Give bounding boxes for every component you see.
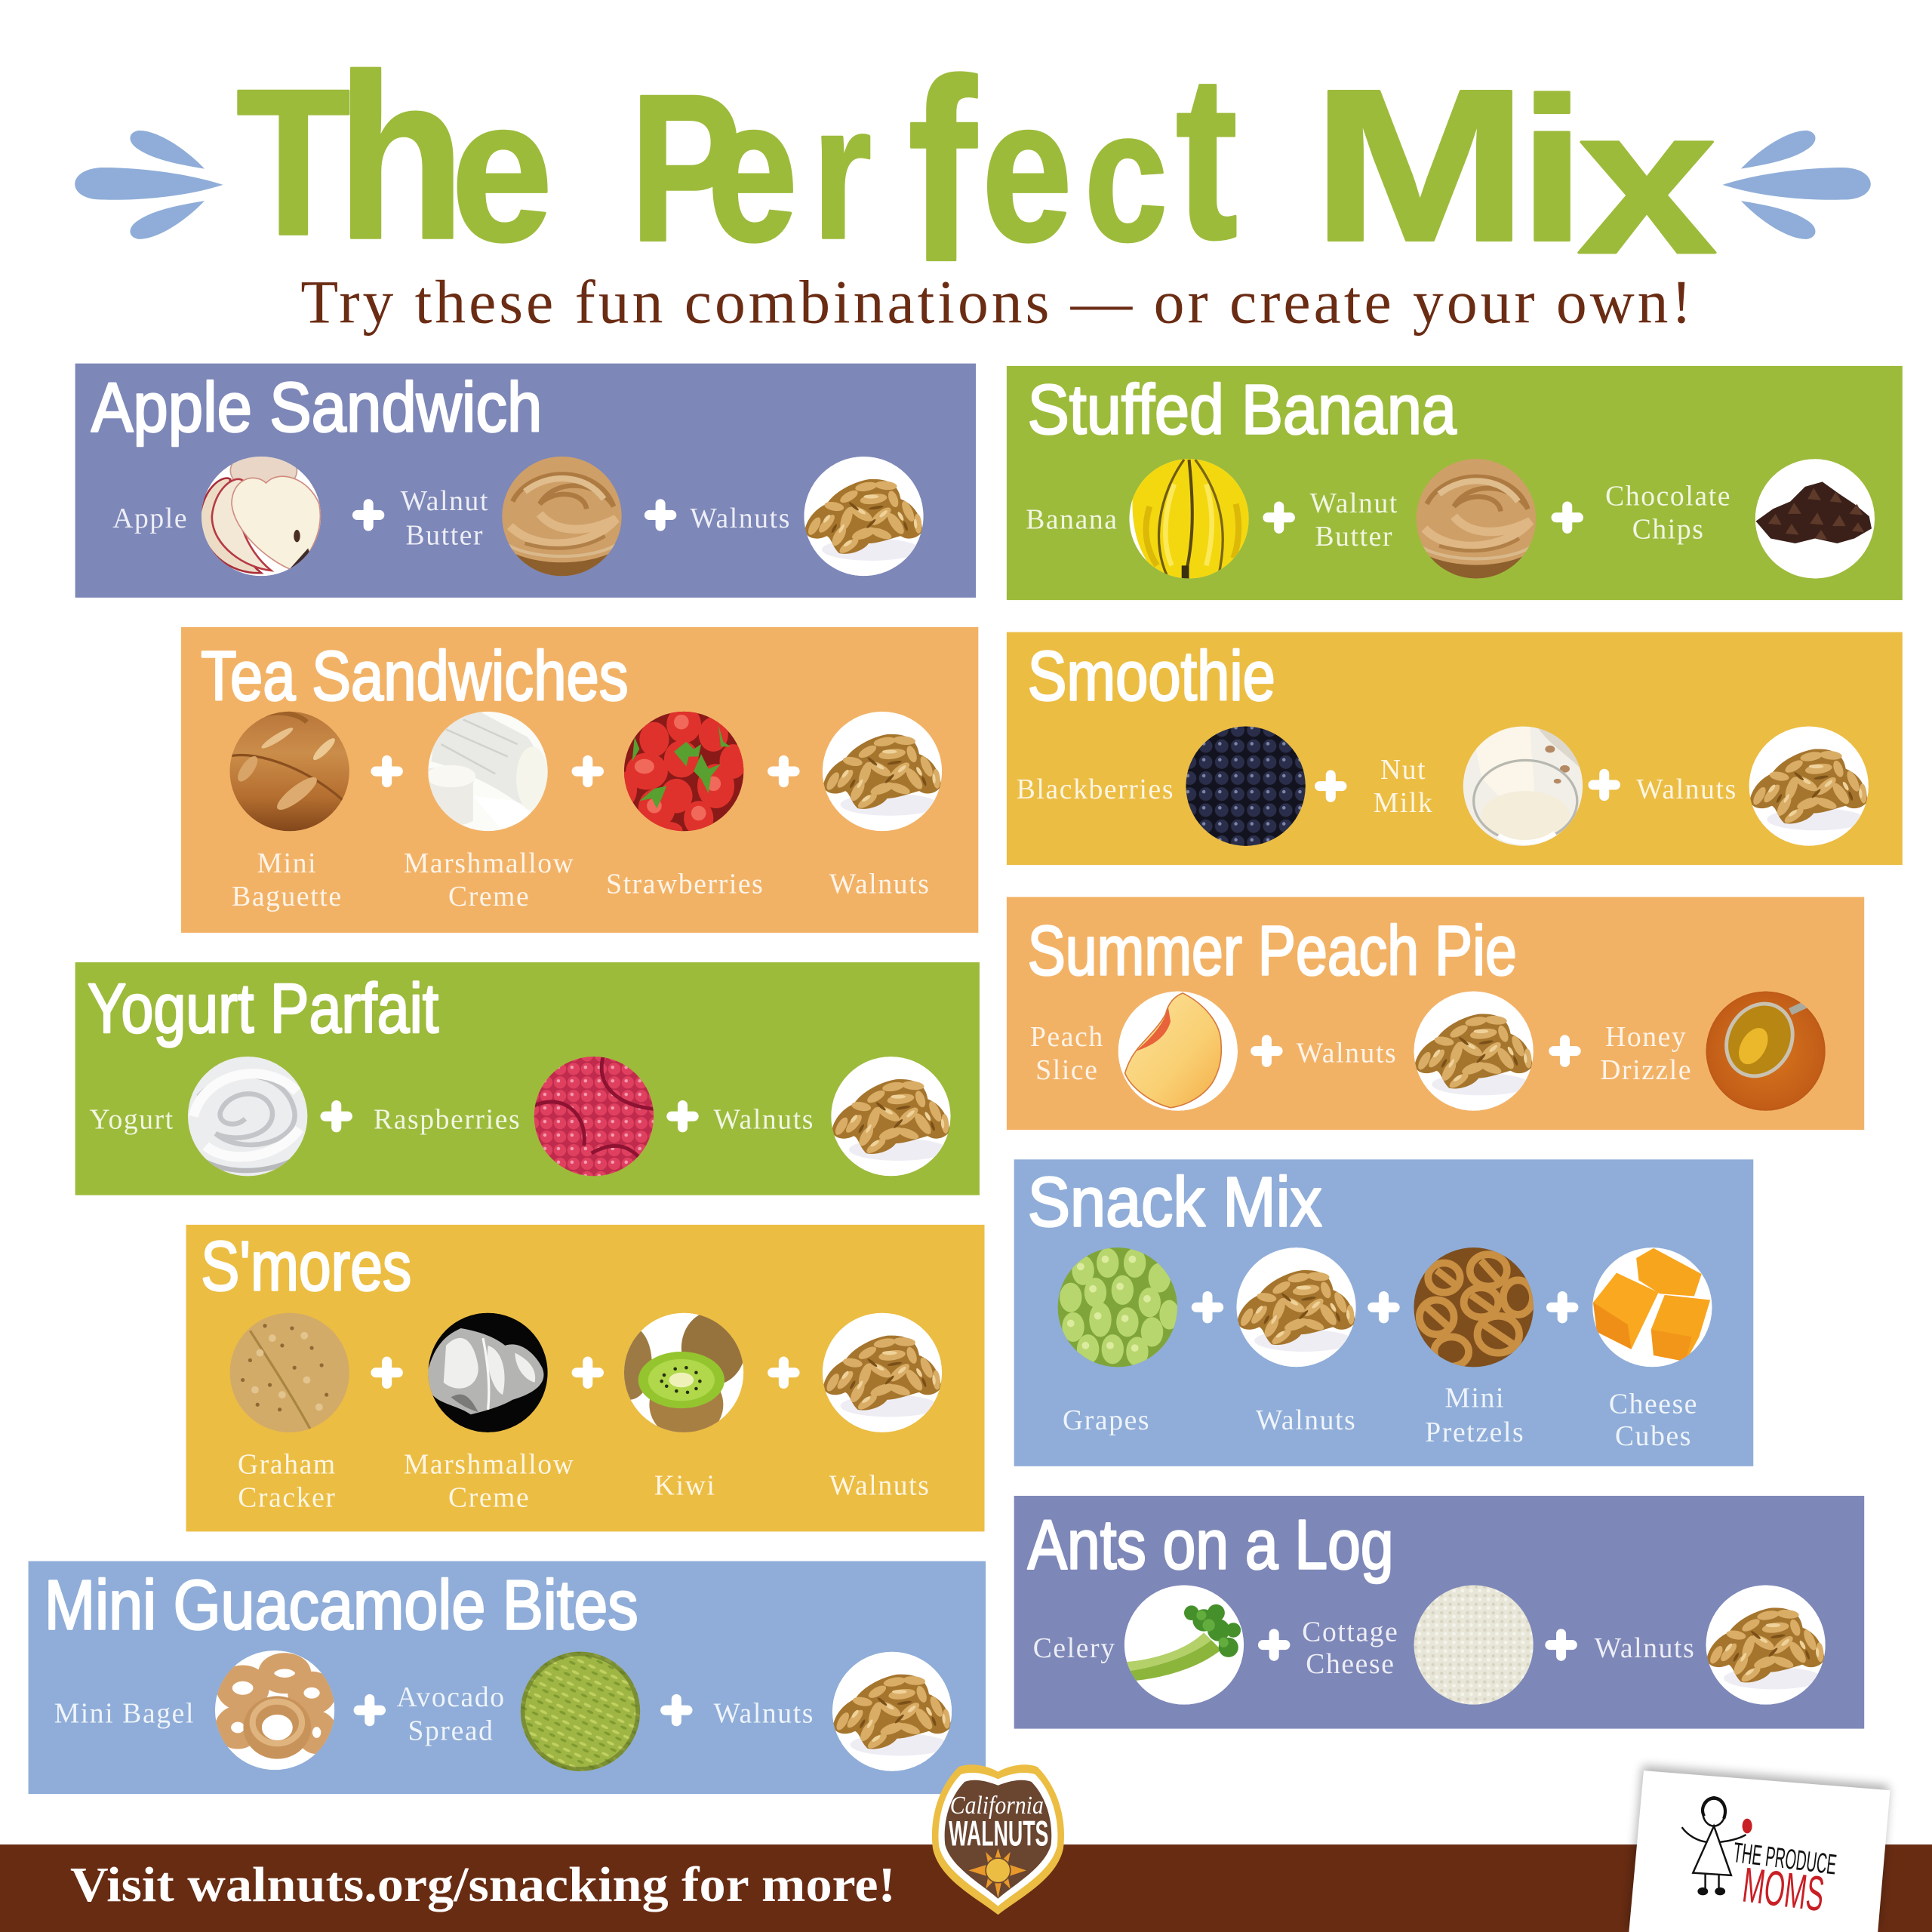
- heading: Yogurt Parfait: Yogurt Parfait: [88, 969, 438, 1048]
- label: Cottage Cheese: Cheese: [1306, 1649, 1395, 1680]
- icon: walnuts: [1236, 1247, 1356, 1367]
- label: Walnut Butter: Walnut: [401, 486, 489, 517]
- icon: sun: [968, 1848, 1026, 1899]
- title: e: [982, 56, 1072, 284]
- icon: marshmallow creme: [426, 1313, 548, 1432]
- label: Honey Drizzle: Honey: [1605, 1022, 1687, 1053]
- label: Walnut Butter: Walnut: [1310, 488, 1398, 519]
- label: Chocolate Chips: Chocolate: [1605, 481, 1731, 512]
- label: Peach Slice: Slice: [1035, 1055, 1099, 1086]
- label: Nut Milk: Nut: [1380, 755, 1426, 786]
- label: Marshmallow Creme: Creme: [448, 881, 530, 912]
- icon: apple in hand: [1743, 1819, 1752, 1833]
- heading: Summer Peach Pie: Summer Peach Pie: [1028, 911, 1517, 989]
- label: Walnut Butter: Butter: [1315, 521, 1393, 552]
- label: Graham Cracker: Graham: [238, 1450, 337, 1481]
- heading: Tea Sandwiches: Tea Sandwiches: [201, 636, 629, 715]
- title: c: [1084, 71, 1168, 280]
- label: Banana: Banana: [1026, 504, 1118, 535]
- label: Blackberries: Blackberries: [1017, 774, 1174, 805]
- label: Yogurt: Yogurt: [89, 1105, 174, 1136]
- panel: Yogurt Parfait: [75, 962, 980, 1195]
- panel: Summer Peach Pie: [1007, 897, 1864, 1130]
- icon: left splash: [75, 131, 223, 239]
- icon: mini pretzels: [1412, 1246, 1535, 1369]
- label: Peach Slice: Peach: [1030, 1022, 1104, 1053]
- icon: plus: [376, 1361, 398, 1383]
- icon: peach slice: [1118, 991, 1238, 1111]
- icon: baguette: [228, 709, 351, 833]
- icon: kiwi: [608, 1311, 746, 1439]
- heading: Snack Mix: Snack Mix: [1028, 1162, 1322, 1241]
- icon: walnuts: [823, 1313, 942, 1432]
- label: Marshmallow Creme: Marshmallow: [404, 848, 574, 879]
- label: Apple: Apple: [112, 503, 188, 534]
- footer band: [0, 1844, 1932, 1932]
- icon: banana: [1129, 457, 1251, 580]
- icon: plus: [773, 760, 795, 783]
- panel: S'mores: [186, 1225, 984, 1531]
- icon: plus: [1263, 1634, 1285, 1656]
- label: Raspberries: Raspberries: [374, 1105, 521, 1136]
- icon: plus: [1556, 506, 1578, 528]
- label: Grapes: Grapes: [1063, 1405, 1150, 1436]
- label: Honey Drizzle: Drizzle: [1600, 1055, 1692, 1086]
- icon: raspberries: [532, 1055, 656, 1178]
- label: Strawberries: Strawberries: [606, 869, 764, 900]
- heading: Stuffed Banana: Stuffed Banana: [1028, 371, 1457, 449]
- label: Walnut Butter: Butter: [406, 521, 484, 552]
- label: Celery: Celery: [1033, 1633, 1116, 1664]
- icon: plus: [357, 504, 380, 526]
- panel: Stuffed Banana: [1007, 366, 1903, 600]
- logo: California Walnuts: [932, 1764, 1064, 1915]
- label: Walnuts: Walnuts: [1297, 1038, 1397, 1069]
- label: Cheese Cubes: Cheese: [1609, 1389, 1698, 1420]
- icon: walnut butter: [500, 454, 623, 578]
- label: Mini Baguette: Baguette: [232, 881, 343, 912]
- title: f: [908, 26, 979, 315]
- panel: Ants on a Log: [1014, 1496, 1864, 1729]
- label: Kiwi: Kiwi: [654, 1470, 716, 1501]
- label: Nut Milk: Milk: [1374, 788, 1433, 819]
- icon: plus: [1373, 1297, 1395, 1318]
- icon: walnuts: [823, 712, 942, 831]
- label: Mini Pretzels: Pretzels: [1425, 1417, 1524, 1448]
- title: T: [236, 45, 351, 278]
- icon: walnut butter: [1414, 457, 1538, 580]
- title: M: [1312, 45, 1528, 287]
- icon: nut milk: [1461, 724, 1585, 848]
- label: Avocado Spread: Spread: [408, 1715, 494, 1746]
- label: Cheese Cubes: Cubes: [1615, 1421, 1692, 1452]
- label: Mini Baguette: Mini: [257, 848, 317, 879]
- panel: Tea Sandwiches: [181, 627, 978, 933]
- title: e: [451, 57, 552, 284]
- icon: cottage cheese: [1414, 1585, 1534, 1705]
- heading: Ants on a Log: Ants on a Log: [1028, 1505, 1394, 1583]
- label: Chocolate Chips: Chips: [1632, 514, 1705, 545]
- icon: walnuts: [1749, 726, 1869, 846]
- icon: plus: [672, 1105, 694, 1128]
- icon: chocolate chips: [1755, 459, 1875, 579]
- heading: Apple Sandwich: Apple Sandwich: [91, 368, 542, 446]
- label: Cottage Cheese: Cottage: [1302, 1617, 1398, 1648]
- icon: plus: [577, 1361, 598, 1383]
- icon: yogurt: [186, 1055, 309, 1178]
- icon: grapes: [1056, 1246, 1179, 1369]
- label: Walnuts: Walnuts: [829, 1470, 930, 1501]
- icon: graham cracker: [228, 1311, 351, 1434]
- label: Avocado Spread: Avocado: [396, 1682, 506, 1713]
- icon: plus: [1554, 1040, 1576, 1062]
- heading: Smoothie: Smoothie: [1028, 636, 1275, 715]
- logo text: California: California: [950, 1791, 1044, 1820]
- label: Marshmallow Creme: Creme: [448, 1483, 530, 1514]
- icon: cheese cubes: [1592, 1247, 1712, 1367]
- icon: walnuts: [1706, 1585, 1826, 1705]
- panel: Apple Sandwich: [75, 364, 976, 598]
- panel: Smoothie: [1007, 632, 1903, 865]
- title: P: [630, 51, 742, 285]
- icon: plus: [325, 1105, 347, 1128]
- icon: right splash: [1722, 131, 1871, 239]
- logo card: The Produce Moms: [1628, 1766, 1890, 1932]
- title: [236, 26, 1718, 315]
- icon: plus: [1268, 506, 1290, 528]
- icon: plus: [1256, 1040, 1278, 1062]
- icon: plus: [376, 760, 398, 783]
- label: Mini Pretzels: Mini: [1445, 1383, 1505, 1414]
- icon: stick figure: [1682, 1798, 1752, 1894]
- heading: Mini Guacamole Bites: Mini Guacamole Bites: [45, 1565, 638, 1644]
- label: Graham Cracker: Cracker: [238, 1483, 337, 1514]
- icon: plus: [1320, 775, 1342, 797]
- icon: mini bagels: [215, 1651, 334, 1770]
- title: h: [337, 26, 466, 288]
- icon: plus: [1196, 1297, 1219, 1318]
- icon: plus: [666, 1699, 688, 1721]
- title: i: [1518, 56, 1586, 284]
- label: Walnuts: Walnuts: [1636, 774, 1737, 805]
- icon: walnuts: [1414, 991, 1534, 1111]
- icon: plus: [1552, 1297, 1574, 1318]
- heading: S'mores: S'mores: [201, 1226, 411, 1305]
- icon: plus: [649, 504, 672, 526]
- title: t: [1176, 26, 1238, 288]
- label: Walnuts: Walnuts: [713, 1698, 814, 1729]
- icon: honey: [1706, 989, 1826, 1111]
- icon: plus: [773, 1361, 795, 1383]
- title: e: [707, 56, 798, 284]
- subtitle: Try these fun combinations — or create your own!: [300, 268, 1692, 337]
- icon: blackberries: [1184, 724, 1307, 848]
- footer call to action: Visit walnuts.org/snacking for more!: [70, 1858, 896, 1912]
- label: Walnuts: Walnuts: [713, 1105, 814, 1136]
- icon: apple: [199, 450, 321, 576]
- label: Walnuts: Walnuts: [1256, 1405, 1356, 1436]
- icon: walnuts: [804, 457, 924, 576]
- icon: marshmallow creme: [426, 709, 549, 831]
- title: x: [1577, 63, 1718, 297]
- icon: celery: [1122, 1585, 1244, 1705]
- icon: avocado spread: [518, 1650, 642, 1773]
- label: Marshmallow Creme: Marshmallow: [404, 1450, 574, 1481]
- label: Walnuts: Walnuts: [829, 869, 930, 900]
- icon: walnuts: [832, 1652, 952, 1771]
- label: Mini Bagel: Mini Bagel: [54, 1698, 195, 1729]
- icon: plus: [1550, 1634, 1572, 1656]
- title: r: [812, 66, 872, 278]
- label: Walnuts: Walnuts: [1595, 1633, 1695, 1664]
- icon: plus: [358, 1699, 380, 1721]
- panel: Mini Guacamole Bites: [29, 1561, 986, 1794]
- icon: plus: [577, 760, 598, 783]
- logo text: WALNUTS: WALNUTS: [949, 1814, 1048, 1854]
- label: Walnuts: Walnuts: [690, 503, 791, 534]
- icon: strawberries: [617, 706, 746, 839]
- icon: walnuts: [831, 1057, 951, 1176]
- panel: Snack Mix: [1014, 1159, 1753, 1466]
- icon: plus: [1593, 774, 1615, 796]
- logo text: MOMS: MOMS: [1740, 1857, 1827, 1921]
